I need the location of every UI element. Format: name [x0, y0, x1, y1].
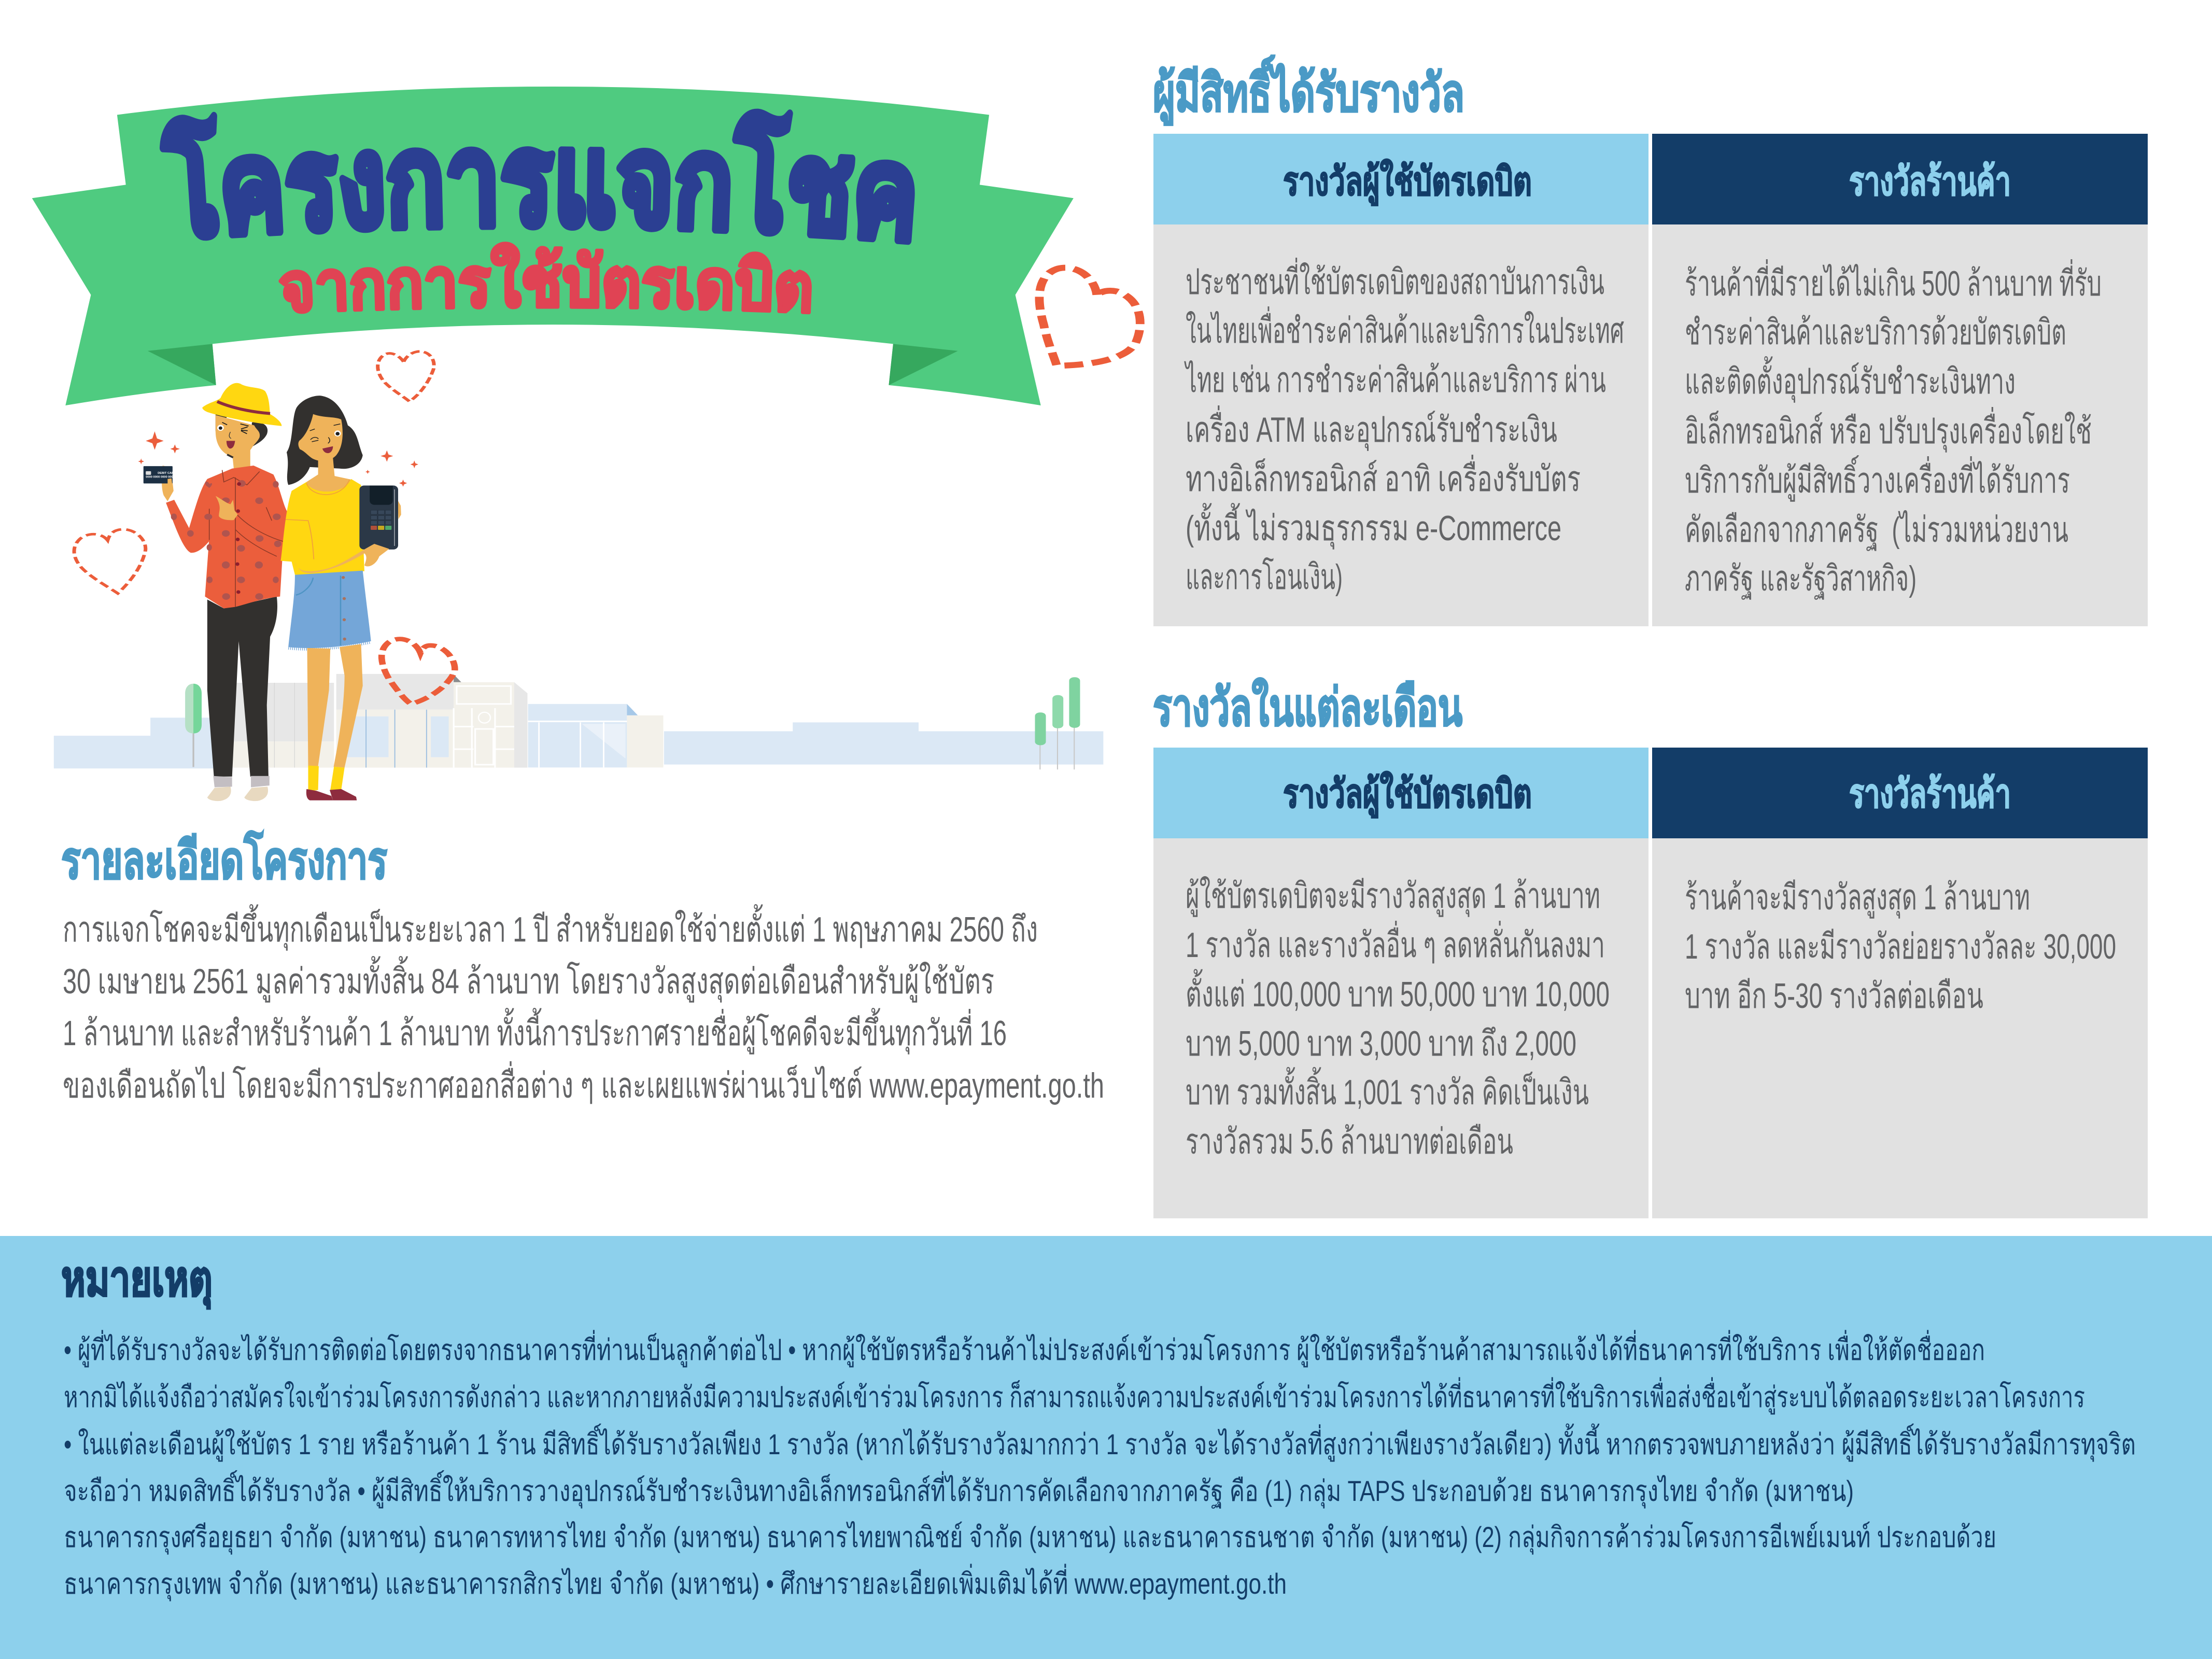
body text: บาท 5,000 บาท 3,000 บาท ถึง 2,000 — [1186, 1024, 1576, 1063]
body text: ผู้ใช้บัตรเดบิตจะมีรางวัลสูงสุด 1 ล้านบาท — [1186, 876, 1600, 917]
text block: project details: ของเดือนถัดไป โดยจะมีการประกาศออกสื่อต่าง ๆ และเผยแพร่ผ่านเว็บไซต์ www.epayment.go.th — [63, 1061, 1104, 1105]
illustration: couple — [138, 383, 418, 801]
body text: ภาครัฐ และรัฐวิสาหกิจ) — [1685, 559, 1917, 600]
banner — [32, 87, 1074, 405]
man: DEBIT CARD — [158, 472, 176, 475]
hand and debit card — [162, 466, 174, 501]
icon: trees — [185, 677, 1080, 769]
skyline background — [54, 674, 1103, 768]
body text: ตั้งแต่ 100,000 บาท 50,000 บาท 10,000 — [1186, 969, 1610, 1014]
text block: notes — [64, 1330, 2136, 1601]
body text: ในไทยเพื่อชำระค่าสินค้าและบริการในประเทศ — [1186, 306, 1624, 350]
body text: 1 รางวัล และรางวัลอื่น ๆ ลดหลั่นกันลงมา — [1186, 921, 1605, 965]
text block: project details: 30 เมษายน 2561 มูลค่ารวมทั้งสิ้น 84 ล้านบาท โดยรางวัลสูงสุดต่อเดือนสำหรับผู้ใช้บัตร — [63, 956, 994, 1003]
subtitle: จากการใช้บัตรเดบิต — [278, 242, 812, 314]
panel: monthly prizes merchants: รางวัลร้านค้า — [1849, 772, 2011, 816]
body text: บาท อีก 5-30 รางวัลต่อเดือน — [1685, 976, 1983, 1016]
hat — [202, 383, 281, 426]
title: โครงการแจกโชค — [160, 109, 915, 245]
body text: ไทย เช่น การชำระค่าสินค้าและบริการ ผ่าน — [1184, 360, 1606, 400]
body text: (ทั้งนี้ ไม่รวมธุรกรรม e-Commerce — [1186, 503, 1561, 550]
section heading: project details: รายละเอียดโครงการ — [61, 830, 387, 890]
sparkles — [365, 451, 418, 487]
text block: project details: 1 ล้านบาท และสำหรับร้านค้า 1 ล้านบาท ทั้งนี้การประกาศรายชื่อผู้โชคดีจะมีขึ้นทุกวันที่ 16 — [63, 1008, 1007, 1055]
body text: และติดตั้งอุปกรณ์รับชำระเงินทาง — [1685, 356, 2016, 403]
sparkles — [138, 431, 180, 465]
panel: eligibility merchants — [1652, 134, 2148, 626]
body text: เครื่อง ATM และอุปกรณ์รับชำระเงิน — [1186, 405, 1557, 451]
panel: monthly prizes debit card users — [1153, 748, 1649, 1218]
section heading: eligible winners: ผู้มีสิทธิ์ได้รับรางวัล — [1153, 55, 1464, 125]
text block: project details: การแจกโชคจะมีขึ้นทุกเดือนเป็นระยะเวลา 1 ปี สำหรับยอดใช้จ่ายตั้งแต่ 1 พฤษภาคม 2560 ถึง — [63, 904, 1038, 951]
woman — [280, 396, 418, 800]
panel: notes — [0, 1236, 2212, 1659]
man — [138, 383, 287, 801]
heading: notes: หมายเหตุ — [61, 1252, 213, 1309]
panel: monthly prizes debit card users: รางวัลผู้ใช้บัตรเดบิต — [1283, 771, 1532, 818]
panel: eligibility debit card users — [1153, 134, 1649, 626]
body text: บาท รวมทั้งสิ้น 1,001 รางวัล คิดเป็นเงิน — [1186, 1067, 1589, 1112]
body text — [1685, 259, 2102, 600]
text block: project details — [63, 904, 1104, 1105]
section heading: monthly prizes: รางวัลในแต่ละเดือน — [1153, 678, 1462, 737]
body text — [1685, 878, 2116, 1016]
payment terminal — [359, 485, 398, 550]
man: 0000 0000 0000 0000 — [146, 476, 175, 479]
body text: รางวัลรวม 5.6 ล้านบาทต่อเดือน — [1186, 1122, 1513, 1161]
body text — [1184, 258, 1624, 597]
body text: ทางอิเล็กทรอนิกส์ อาทิ เครื่องรับบัตร — [1186, 455, 1581, 499]
body text: ร้านค้าจะมีรางวัลสูงสุด 1 ล้านบาท — [1685, 878, 2030, 919]
body text — [1186, 876, 1610, 1161]
icon: dashed hearts — [74, 268, 1140, 704]
panel: monthly prizes merchants — [1652, 748, 2148, 1218]
panel: eligibility merchants: รางวัลร้านค้า — [1849, 160, 2011, 204]
text block: notes: ธนาคารกรุงเทพ จำกัด (มหาชน) และธนาคารกสิกรไทย จำกัด (มหาชน) • ศึกษารายละเอียดเพิ่มเติมได้ที่ www.epayment.go.th — [64, 1564, 1287, 1601]
body text: ประชาชนที่ใช้บัตรเดบิตของสถาบันการเงิน — [1186, 258, 1604, 302]
panel: eligibility debit card users: รางวัลผู้ใช้บัตรเดบิต — [1283, 159, 1532, 206]
body text: และการโอนเงิน) — [1186, 557, 1343, 597]
shirt hearts — [171, 480, 281, 600]
